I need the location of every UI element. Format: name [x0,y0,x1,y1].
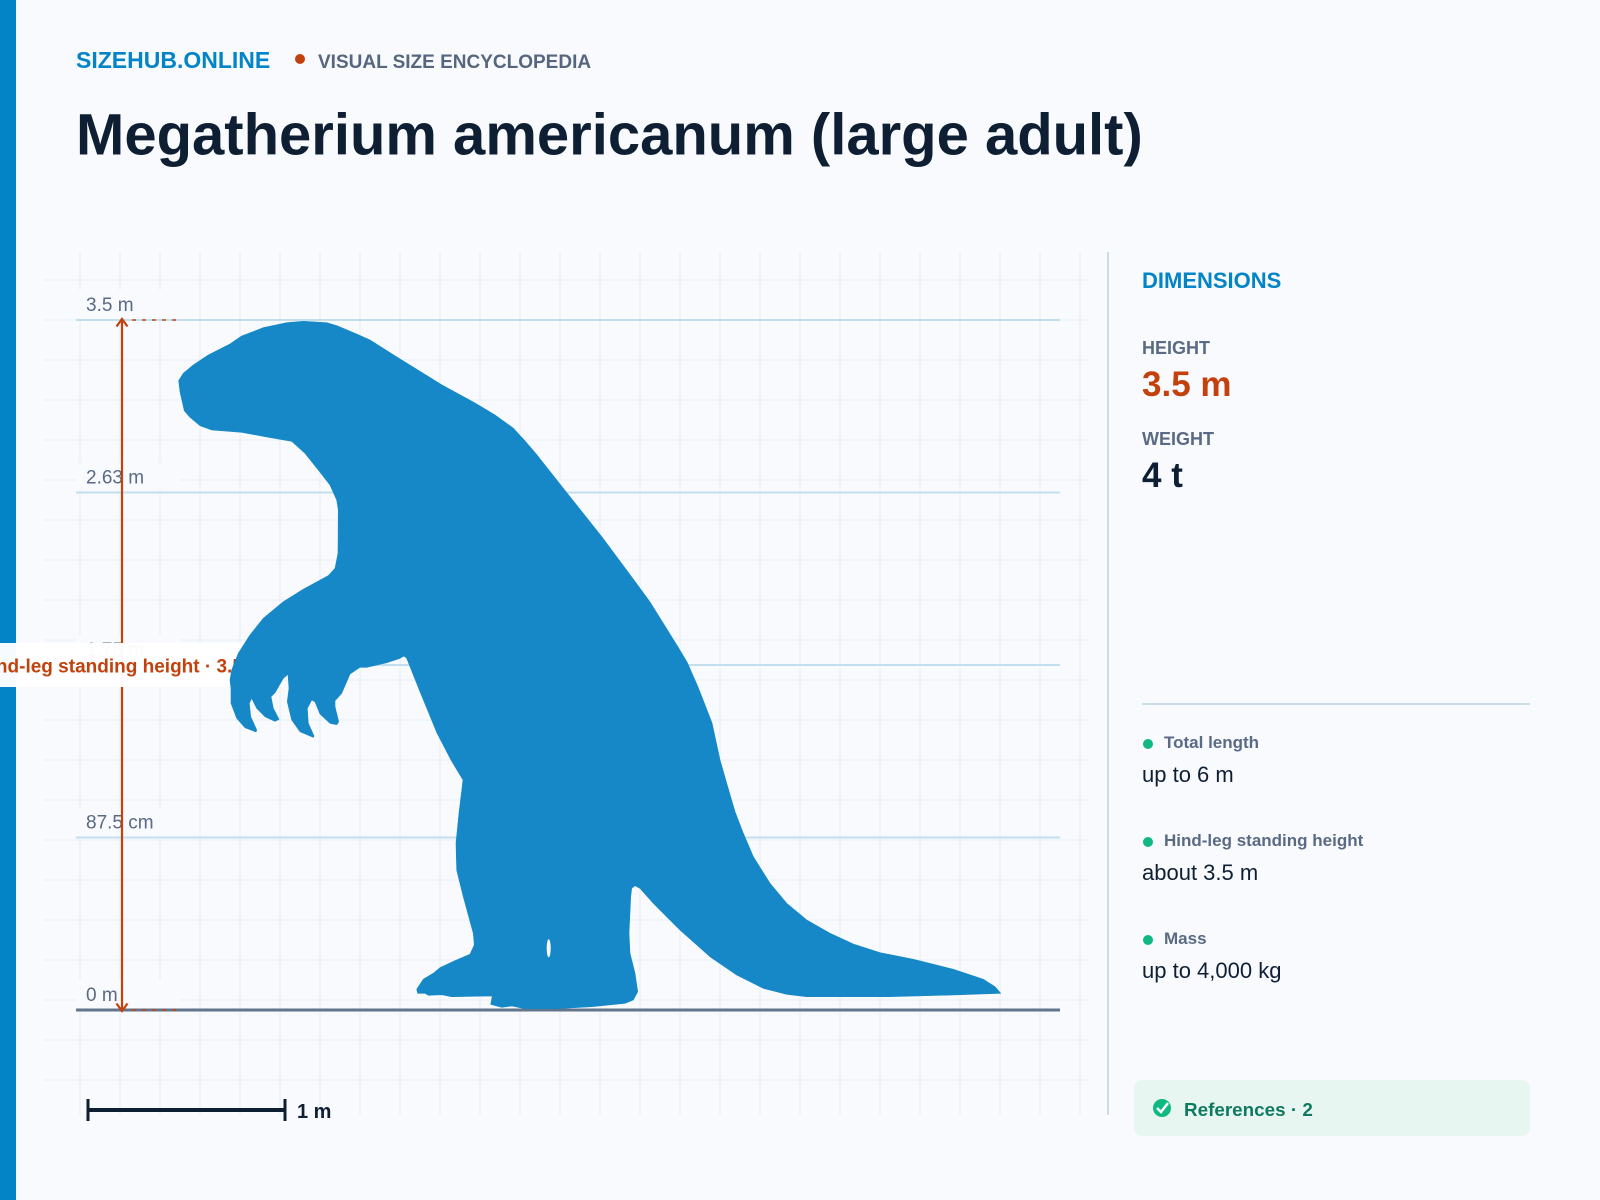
scale bar [88,1099,331,1123]
panel: dimensions [1142,268,1281,495]
references badge: References · 2 [1184,1099,1313,1120]
icon: check circle [1153,1099,1171,1117]
fact: mass: up to 4,000 kg [1142,958,1281,983]
height label: HEIGHT [1142,338,1210,358]
label 1.75 m: 1.75 m [86,640,144,661]
tagline: VISUAL SIZE ENCYCLOPEDIA [318,52,591,73]
megatherium silhouette [179,321,1001,1009]
fact: total length: Total length [1164,733,1259,752]
label 2.63 m: 2.63 m [86,468,144,488]
fact: hind-leg standing height: Hind-leg standing height [1164,831,1364,850]
weight value: 4 t [1142,456,1183,495]
fact: total length [1142,733,1259,787]
references badge [1134,1080,1530,1136]
fact: hind-leg standing height [1142,831,1364,885]
height callout label [0,643,284,687]
fact: mass: Mass [1164,929,1207,948]
panel divider [1107,252,1109,1115]
label 0 m: 0 m [86,985,118,1006]
height dimension arrow [116,319,176,1011]
fact: hind-leg standing height: about 3.5 m [1142,860,1258,885]
accent bar [0,0,16,1200]
label 3.5 m: 3.5 m [86,295,134,316]
height value: 3.5 m [1142,365,1232,404]
brand name: SIZEHUB.ONLINE [76,47,270,73]
dimensions heading: DIMENSIONS [1142,268,1281,293]
fact: total length: up to 6 m [1142,762,1234,787]
height reference lines and labels [76,290,1060,1010]
weight label: WEIGHT [1142,429,1214,449]
fact: mass [1142,929,1281,983]
label 87.5 cm: 87.5 cm [86,812,154,834]
title: Megatherium americanum (large adult) [76,102,1143,168]
header [76,47,1143,168]
header dot [295,54,305,64]
scale bar: 1 m [297,1101,331,1123]
